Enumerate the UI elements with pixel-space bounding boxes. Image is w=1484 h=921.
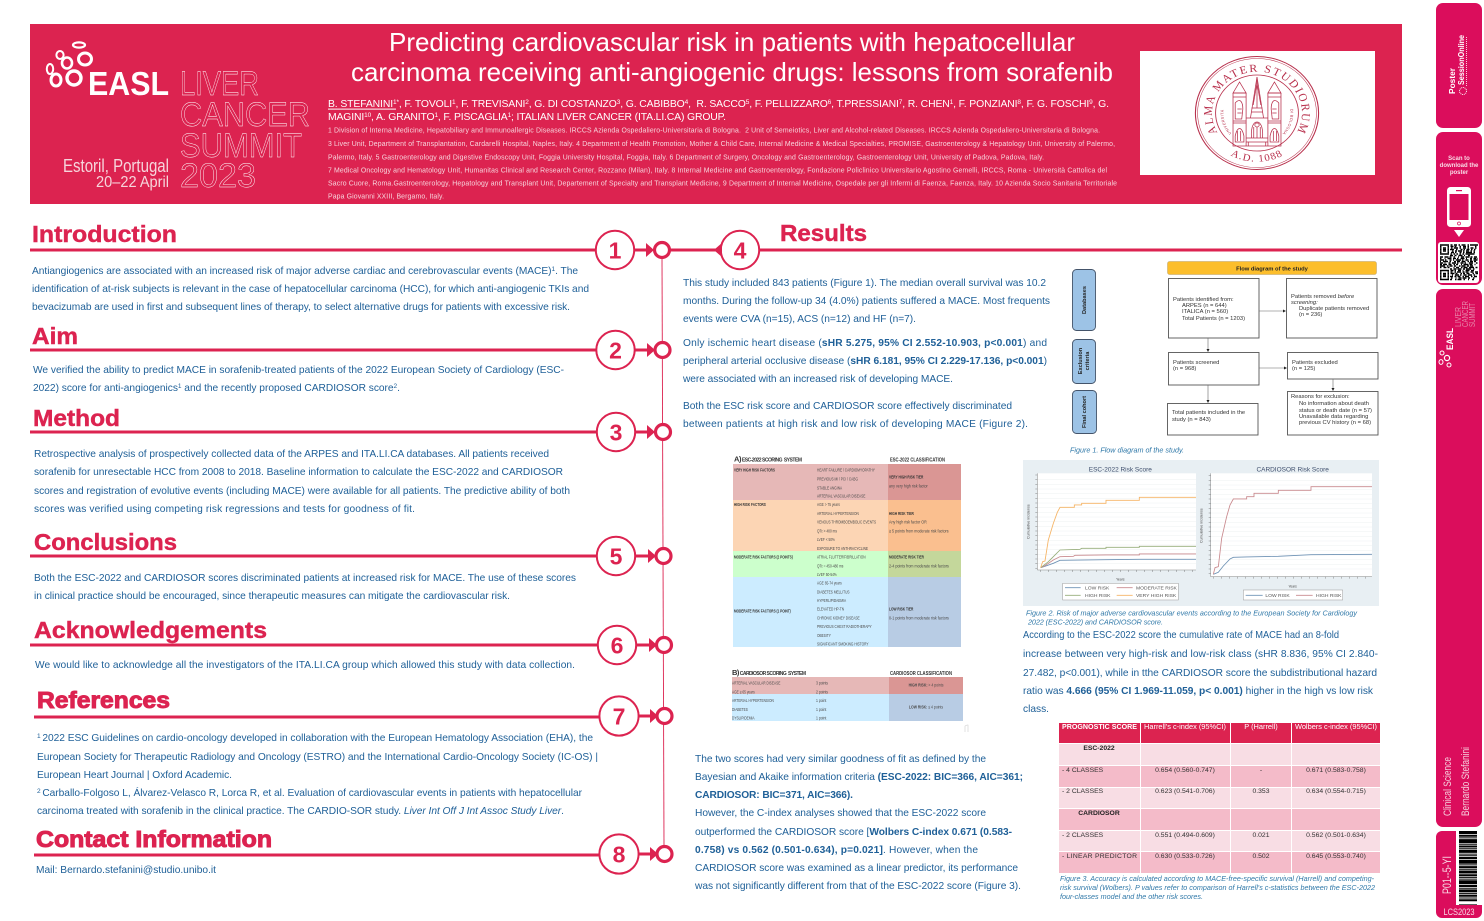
sidebar xyxy=(1436,3,1482,918)
flow header: Flow diagram of the study xyxy=(1236,266,1309,272)
table rows: - 2 CLASSES xyxy=(1062,832,1104,839)
table A: ESC-2022 scoring system: STABLE ANGINA xyxy=(817,485,842,491)
sidebar: poster session online logo xyxy=(1436,3,1482,128)
sidebar: poster session online logo: SessionOnline xyxy=(1457,35,1466,85)
table rows xyxy=(1059,744,1380,873)
authors xyxy=(328,99,1109,123)
heading: method: Method xyxy=(33,405,120,431)
results text upper: peripheral arterial occlusive disease (sHR 6.181, 95% CI 2.229-17.136, p<0.001) xyxy=(683,356,1047,367)
authors: 8 xyxy=(1017,99,1021,106)
results text lower: 0.758) vs 0.562 (0.501-0.634), p=0.021]. However, when the xyxy=(695,845,978,856)
sidebar: scan to download: poster xyxy=(1450,170,1469,176)
table A: ESC-2022 scoring system: AGE 65-74 years xyxy=(817,580,842,586)
introduction text: identification of at-risk subjects is relevant in the case of hepatocellular carcinoma (HCC), for which anti-angiogenic TKIs and xyxy=(32,284,589,295)
chart: ESC-2022 risk score: MODERATE RISK xyxy=(1136,585,1178,591)
University of Bologna seal xyxy=(1140,51,1375,175)
aim text: 2 xyxy=(394,383,398,390)
table rows: 0.671 (0.583-0.758) xyxy=(1306,767,1366,774)
affiliations: Papa Giovanni XXIII, Bergamo, Italy. xyxy=(328,194,444,200)
chart: CARDIOSOR risk score: HIGH RISK xyxy=(1316,593,1342,599)
results text right xyxy=(1023,630,1378,715)
table B: CARDIOSOR scoring system: ARTERIAL VASCULAR DISEASE xyxy=(732,680,781,686)
affiliations: 1 Division of Interna Medicine, Hepatobiliary and Immunoallergic Diseases. IRCCS Azienda Ospedaliero-Universitaria di Bologna. 2 Unit of Semeiotics, Liver and Alcohol-related Diseases. IRCCS Azienda Ospedaliero-Universitaria di Bologna. xyxy=(328,128,1100,134)
conclusions text xyxy=(34,573,576,602)
title xyxy=(351,27,1113,87)
results text lower: outperformed the CARDIOSOR score [Wolbers C-index 0.671 (0.583- xyxy=(695,827,1012,838)
authors: 9 xyxy=(1089,99,1093,106)
aim text: 1 xyxy=(178,383,182,390)
sidebar: scan to download xyxy=(1436,132,1482,285)
EASL Liver Cancer Summit logo: 2023 xyxy=(180,157,256,195)
aim text: and the recently proposed CARDIOSOR score xyxy=(181,383,394,394)
authors: 10 xyxy=(364,112,372,119)
table rows: ESC-2022 xyxy=(1083,745,1115,752)
table A: ESC-2022 scoring system: any very high risk factor xyxy=(889,483,928,489)
affiliations: 7 Medical Oncology and Hematology Unit, Humanitas Clinical and Research Center, Rozzano (Milan), Italy. 8 Internal Medicine and Gastroenterology, Fondazione Policlinico Universitario Agostino Gemelli, IRCCS, Roma - Università Cattolica del xyxy=(328,168,1107,174)
authors: , F. TREVISANI xyxy=(456,99,525,110)
table A: ESC-2022 scoring system: ESC-2022 CLASSIFICATION xyxy=(890,458,945,464)
method text: scores was verified using competing risk regressions and tests for goodness of fit. xyxy=(34,504,415,515)
node 1: 1 xyxy=(609,238,622,264)
node 7: 7 xyxy=(613,704,625,730)
table B: CARDIOSOR scoring system: LOW RISK: ≤ 4 points xyxy=(909,704,943,710)
conclusions text: Both the ESC-2022 and CARDIOSOR scores discriminated patients at increased risk for MACE. The use of these scores xyxy=(34,573,576,584)
stage labels: Exclusion xyxy=(1078,347,1084,374)
EASL Liver Cancer Summit logo: SUMMIT xyxy=(180,127,302,165)
authors: 3 xyxy=(617,99,621,106)
results text lower: CARDIOSOR score was examined as a linear predictor, its performance xyxy=(695,863,1018,874)
table A: ESC-2022 scoring system: VERY HIGH RISK FACTORS xyxy=(734,467,775,473)
table B: CARDIOSOR scoring system: 3 points xyxy=(816,680,828,686)
node 4 xyxy=(714,231,759,269)
figure 3 caption: Figure 3. Accuracy is calculated according to MACE-free-specific survival (Harrell) and competing- xyxy=(1060,874,1375,883)
aim text xyxy=(33,365,564,394)
flow text: screening: xyxy=(1291,300,1318,306)
authors: , F. G. FOSCHI xyxy=(1021,99,1089,110)
heading: contact information: Contact Information xyxy=(36,826,272,852)
chart: CARDIOSOR risk score: Years xyxy=(1288,584,1297,588)
University of Bologna seal: A.D. 1088 xyxy=(1230,150,1282,162)
stage labels xyxy=(1072,270,1096,434)
icon: phone xyxy=(1447,187,1471,227)
authors: 1 xyxy=(434,112,438,119)
timeline connector xyxy=(654,242,722,846)
authors: B. STEFANINI xyxy=(328,99,393,110)
table rows: 0.654 (0.560-0.747) xyxy=(1155,767,1215,774)
authors: 1 xyxy=(508,112,512,119)
authors: 2 xyxy=(525,99,529,106)
node 6 xyxy=(598,626,672,664)
figure 3 caption xyxy=(1060,874,1375,901)
sidebar: poster session online logo: Poster xyxy=(1447,67,1457,94)
flow text: Patients screened xyxy=(1173,360,1219,366)
contact text: Mail: Bernardo.stefanini@studio.unibo.it xyxy=(36,865,216,876)
table A: ESC-2022 scoring system: MODERATE RISK FACTORS (2 POINTS) xyxy=(734,554,793,560)
affiliations: 3 Liver Unit, Department of Transplantation, Cardarelli Hospital, Naples, Italy. 4 Department of Health Promotion, Mother & Child Care, Internal Medicine & Medical Specialties, PROMISE, Gastroenterology & Hepatology Unit, University of Palermo, xyxy=(328,141,1115,148)
authors: , G. xyxy=(1093,99,1109,110)
results text upper: events were CVA (n=15), ACS (n=12) and HF (n=7). xyxy=(683,314,916,325)
introduction text: 1 xyxy=(551,266,555,273)
table rows: 0.630 (0.533-0.726) xyxy=(1155,853,1215,860)
table A: ESC-2022 scoring system: PREVIOUS MI / PCI / CABG xyxy=(817,476,858,482)
table A: ESC-2022 scoring system: QTc > 480 ms xyxy=(817,528,837,534)
table B: CARDIOSOR scoring system: 1 point xyxy=(816,715,827,721)
flow text: Reasons for exclusion: xyxy=(1291,394,1350,400)
flow text: (n = 236) xyxy=(1299,312,1322,318)
method text: scores and registration of evolutive events (including MACE) were available for all patients. The predictive ability of both xyxy=(34,486,570,497)
authors: 1* xyxy=(393,99,399,106)
chart: ESC-2022 risk score xyxy=(1027,467,1196,600)
table A: ESC-2022 scoring system: LOW RISK TIER xyxy=(889,606,913,612)
results text right: According to the ESC-2022 score the cumulative rate of MACE had an 8-fold xyxy=(1023,630,1339,641)
table A: ESC-2022 scoring system: EXPOSURE TO ANTHRACYCLINE xyxy=(817,545,868,551)
table A: ESC-2022 scoring system: PREVIOUS CHEST RADIOTHERAPY xyxy=(817,623,872,629)
table rows: - 2 CLASSES xyxy=(1062,788,1104,795)
QR code xyxy=(1438,242,1479,283)
table A: ESC-2022 scoring system: DIABETES MELLITUS xyxy=(817,589,850,595)
heading: conclusions: Conclusions xyxy=(34,529,177,555)
table A: ESC-2022 scoring system: Any high risk factor OR xyxy=(889,519,927,525)
flow text: Unavailable data regarding xyxy=(1299,414,1368,420)
method text: sorafenib for unresectable HCC from 2008 to 2018. Baseline information to calculate the ESC-2022 and CARDIOSOR xyxy=(34,467,563,478)
EASL Liver Cancer Summit logo: EASL xyxy=(88,65,169,102)
table A: ESC-2022 scoring system: 2-4 points from moderate risk factors xyxy=(889,563,949,569)
results text upper: months. During the follow-up 34 (4.0%) patients suffered a MACE. Most frequents xyxy=(683,296,1050,307)
node 5 xyxy=(597,537,671,575)
results text right: increase between very high-risk and low-risk class (sHR 8.836, 95% CI 2.840- xyxy=(1023,649,1378,660)
chart: ESC-2022 risk score: ESC-2022 Risk Score xyxy=(1089,467,1152,474)
table B: CARDIOSOR scoring system: CARDIOSOR CLASSIFICATION xyxy=(890,671,952,677)
node 3: 3 xyxy=(610,420,622,446)
sidebar EASL logo: EASL xyxy=(1445,328,1456,350)
introduction text: Antiangiogenics are associated with an increased risk of major adverse cardiac and cerebrovascular events (MACE) xyxy=(32,266,552,277)
figure 2 caption xyxy=(1026,608,1357,626)
sidebar EASL logo xyxy=(1439,301,1477,367)
heading: results: Results xyxy=(780,220,867,246)
node 2 xyxy=(596,331,670,369)
table rows: CARDIOSOR xyxy=(1078,810,1120,817)
chart: CARDIOSOR risk score xyxy=(1200,467,1372,600)
table B: CARDIOSOR scoring system: B) CARDIOSOR SCORING SYSTEM xyxy=(732,668,806,677)
flow text: (n = 968) xyxy=(1173,366,1196,372)
table A: ESC-2022 scoring system: ARTERIAL VASCULAR DISEASE xyxy=(817,493,866,499)
flow text: study (n = 843) xyxy=(1172,417,1211,423)
table header xyxy=(1059,722,1380,743)
session text: Clinical Science xyxy=(1442,757,1454,816)
results text lower: The two scores had very similar goodness of fit as defined by the xyxy=(695,754,986,765)
table A: ESC-2022 scoring system: LVEF < 50% xyxy=(817,536,835,542)
table B: CARDIOSOR scoring system: DYSLIPIDEMIA xyxy=(732,715,755,721)
University of Bologna seal: DI BOLOGNA xyxy=(1282,109,1294,134)
references text: European Society for Therapeutic Radiology and Oncology (ESTRO) and the International Cardio-Oncology Society (IC-OS) | xyxy=(37,752,598,763)
node 8: 8 xyxy=(613,842,626,868)
sidebar: conference and session xyxy=(1436,289,1482,827)
heading: introduction: Introduction xyxy=(32,221,177,247)
table A: ESC-2022 scoring system: SIGNIFICANT SMOKING HISTORY xyxy=(817,641,869,647)
EASL Liver Cancer Summit logo xyxy=(47,42,310,195)
heading: aim: Aim xyxy=(32,323,78,349)
table rows: 0.634 (0.554-0.715) xyxy=(1306,788,1366,795)
chart: ESC-2022 risk score: Years xyxy=(1116,578,1125,582)
chart: ESC-2022 risk score: Cumulative incidence xyxy=(1027,504,1031,539)
node 1 xyxy=(596,231,654,269)
sidebar EASL logo: LIVER xyxy=(1453,307,1463,327)
flow text: Total Patients (n = 1203) xyxy=(1182,316,1245,322)
table: prognostic accuracy xyxy=(1059,722,1380,873)
section: introduction xyxy=(30,221,654,313)
method text xyxy=(34,449,570,515)
references text xyxy=(37,733,598,817)
table A: ESC-2022 scoring system: CHRONIC KIDNEY DISEASE xyxy=(817,615,860,621)
results text upper xyxy=(682,278,1050,430)
results text upper: between patients at high risk and low risk of developing MACE (Figure 2). xyxy=(683,419,1028,430)
aim text: We verified the ability to predict MACE in sorafenib-treated patients of the 2022 European Society of Cardiology (ESC- xyxy=(33,365,564,376)
section: method xyxy=(30,405,670,515)
table A: ESC-2022 scoring system: HIGH RISK TIER xyxy=(889,510,914,516)
flow text: Total patients included in the xyxy=(1172,410,1245,416)
aim text: 2022) score for anti-angiogenics xyxy=(33,383,178,394)
results text right: 27.482, p<0.001), while in tthe CARDIOSOR score the subdistributional hazard xyxy=(1023,668,1377,679)
table B: CARDIOSOR scoring system: HIGH RISK: > 4 points xyxy=(909,682,943,688)
flow text: No information about death xyxy=(1299,401,1369,407)
introduction text: bevacizumab are used in first and subsequent lines of therapy, to select alternative drugs for patients with excessive risk. xyxy=(32,302,570,313)
section: aim xyxy=(30,323,670,394)
conclusions text: in clinical practice should be encouraged, since therapeutic measures can mitigate the cardiovascular risk. xyxy=(34,591,510,602)
figure 2 panel xyxy=(1023,460,1379,606)
flow diagram xyxy=(1072,262,1378,435)
authors: , G. DI COSTANZO xyxy=(529,99,617,110)
node 4: 4 xyxy=(734,238,747,264)
results text right: class. xyxy=(1023,704,1049,715)
table rows: 0.551 (0.494-0.609) xyxy=(1155,832,1215,839)
sidebar: scan to download: Scan to xyxy=(1448,156,1470,162)
table rows: 0.021 xyxy=(1252,832,1270,839)
table rows: 0.623 (0.541-0.706) xyxy=(1155,788,1215,795)
stage labels: Final cohort xyxy=(1082,396,1088,428)
authors: 5 xyxy=(746,99,750,106)
figure 3 caption: four-classes model and the other risk scores. xyxy=(1060,892,1203,901)
node 3 xyxy=(597,413,670,451)
node 6: 6 xyxy=(611,632,623,658)
University of Bologna seal: ALMA MATER STUDIORUM xyxy=(1204,64,1310,134)
authors: , F. TOVOLI xyxy=(399,99,452,110)
section: acknowledgements xyxy=(30,617,672,671)
table rows: 0.502 xyxy=(1252,853,1270,860)
table A: ESC-2022 scoring system: OBESITY xyxy=(817,632,831,638)
table rows: - xyxy=(1260,767,1262,774)
flow text: (n = 125) xyxy=(1292,366,1315,372)
authors: 6 xyxy=(828,99,832,106)
results text lower xyxy=(694,754,1023,892)
references text: 2 xyxy=(37,788,42,795)
section: references xyxy=(34,687,672,817)
node 5: 5 xyxy=(610,544,623,570)
method text: Retrospective analysis of prospectively collected data of the ARPES and ITA.LI.CA databases. All patients received xyxy=(34,449,549,460)
sidebar EASL logo: CANCER xyxy=(1460,301,1470,327)
table A: ESC-2022 scoring system: ≥ 5 points from moderate risk factors xyxy=(889,528,949,534)
flow text: previous CV history (n = 68) xyxy=(1299,420,1371,426)
figure 2 caption: 2022 (ESC-2022) and CARDIOSOR score. xyxy=(1026,618,1163,626)
EASL Liver Cancer Summit logo: Estoril, Portugal xyxy=(63,156,169,176)
table rows: 0.562 (0.501-0.634) xyxy=(1306,832,1366,839)
table A: ESC-2022 scoring system: HYPERLIPIDAEMIA xyxy=(817,597,846,603)
flow text: Patients identified from: xyxy=(1173,297,1234,303)
table B: CARDIOSOR scoring system: AGE ≥ 65 years xyxy=(732,689,755,695)
table A: ESC-2022 scoring system: LVEF 50-54% xyxy=(817,571,837,577)
introduction text: . The xyxy=(555,266,578,277)
sidebar EASL logo: SUMMIT xyxy=(1467,303,1477,327)
table B: CARDIOSOR scoring system xyxy=(732,668,968,732)
node 8 xyxy=(599,834,672,874)
sidebar: poster code and barcode xyxy=(1436,831,1482,918)
table B: CARDIOSOR scoring system: 1 point xyxy=(816,697,827,703)
results text upper: This study included 843 patients (Figure 1). The median overall survival was 10.2 xyxy=(683,278,1046,289)
chart: ESC-2022 risk score: VERY HIGH RISK xyxy=(1136,593,1177,599)
figure 3 caption: risk survival (Wolbers). P values refer to comparison of Harrell's c-statistics between the ESC-2022 xyxy=(1060,883,1375,892)
flow text: ARPES (n = 644) xyxy=(1182,303,1227,309)
flow text: Patients excluded xyxy=(1292,360,1338,366)
section: conclusions xyxy=(30,529,671,602)
EASL Liver Cancer Summit logo: CANCER xyxy=(180,96,310,134)
EASL Liver Cancer Summit logo: 20–22 April xyxy=(96,174,169,191)
table header: Wolbers c-index (95%CI) xyxy=(1295,722,1377,731)
flow header xyxy=(1168,262,1376,274)
table A: ESC-2022 scoring system xyxy=(733,454,961,647)
table header: P (Harrell) xyxy=(1244,722,1278,731)
flow boxes xyxy=(1168,278,1378,435)
authors: , G. CABIBBO xyxy=(620,99,685,110)
session text: Bernardo Stefanini xyxy=(1460,747,1472,816)
chart: CARDIOSOR risk score: CARDIOSOR Risk Score xyxy=(1256,467,1329,474)
flow text: ITALICA (n = 560) xyxy=(1182,309,1228,315)
authors: , R. CHEN xyxy=(902,99,950,110)
flow text: Patients removed before xyxy=(1291,294,1355,300)
table B: CARDIOSOR scoring system: 2 points xyxy=(816,689,828,695)
table rows: - 4 CLASSES xyxy=(1062,767,1104,774)
authors: 4 xyxy=(685,99,689,106)
table A: ESC-2022 scoring system: HEART FAILURE / CARDIOMYOPATHY xyxy=(817,467,875,473)
affiliations: Palermo, Italy. 5 Gastroenterology and Digestive Endoscopy Unit, Foggia University Hospital, Foggia, Italy. 6 Department of Surgery, Oncology and Gastroenterology, Gastroenterology Unit, University of Padova, Padova, Italy. xyxy=(328,154,1044,162)
table A: ESC-2022 scoring system: AGE > 75 years xyxy=(817,501,840,507)
authors: , R. SACCO xyxy=(688,99,746,110)
figure 1 caption: Figure 1. Flow diagram of the study. xyxy=(1070,446,1184,454)
stage labels: Databases xyxy=(1082,286,1088,314)
sidebar: poster code and barcode: P01--5-YI xyxy=(1440,856,1454,894)
table A: ESC-2022 scoring system: ATRIAL FLUTTER/FIBRILLATION xyxy=(817,554,866,560)
references text: Carballo-Folgoso L, Álvarez-Velasco R, Lorca R, et al. Evaluation of cardiovascular events in patients with hepatocellular xyxy=(42,786,583,799)
header banner xyxy=(30,24,1402,204)
stage labels: criteria xyxy=(1085,351,1091,370)
flow text: status or death date (n = 57) xyxy=(1299,408,1372,414)
table A: ESC-2022 scoring system: A) ESC-2022 SCORING SYSTEM xyxy=(734,454,802,464)
table A: ESC-2022 scoring system: VENOUS THROMBOEMBOLIC EVENTS xyxy=(817,519,876,525)
table B: CARDIOSOR scoring system: ARTERIAL HYPERTENSION xyxy=(732,697,774,703)
references text: 2022 ESC Guidelines on cardio-oncology developed in collaboration with the European Hematology Association (EHA), the xyxy=(42,733,593,744)
table A: ESC-2022 scoring system: 0-1 points from moderate risk factors xyxy=(889,615,949,621)
flow arrows xyxy=(1206,310,1334,403)
table header: PROGNOSTIC SCORE xyxy=(1062,723,1137,731)
table A: ESC-2022 scoring system: ELEVATED HP-TN xyxy=(817,606,844,612)
results text lower: CARDIOSOR: BIC=371, AIC=366). xyxy=(695,790,853,801)
figure 2 caption: Figure 2. Risk of major adverse cardiovascular events according to the European Society for Cardiology xyxy=(1026,608,1357,618)
title: carcinoma receiving anti-angiogenic drugs: lessons from sorafenib xyxy=(351,57,1113,87)
flow text xyxy=(1172,294,1372,426)
heading: acknowledgements: Acknowledgements xyxy=(34,617,267,643)
results text upper: were associated with an increased risk of developing MACE. xyxy=(682,374,953,385)
node 7 xyxy=(599,696,672,736)
node 2: 2 xyxy=(609,338,622,364)
chart: ESC-2022 risk score: HIGH RISK xyxy=(1085,593,1111,599)
session text xyxy=(1442,747,1472,816)
chart: ESC-2022 risk score: LOW RISK xyxy=(1085,585,1110,591)
authors: , F. PISCAGLIA xyxy=(438,112,508,123)
aim text: . xyxy=(397,383,400,394)
authors: ; ITALIAN LIVER CANCER (ITA.LI.CA) GROUP. xyxy=(511,112,726,123)
chart: CARDIOSOR risk score: LOW RISK xyxy=(1265,593,1290,599)
section: results xyxy=(682,220,1402,430)
sidebar: poster code and barcode: LCS2023 xyxy=(1444,907,1474,917)
table A: ESC-2022 scoring system: MODERATE RISK FACTORS (1 POINT) xyxy=(734,608,791,614)
section: contact information xyxy=(34,826,672,876)
authors: , A. GRANITO xyxy=(371,112,435,123)
results text upper: Only ischemic heart disease (sHR 5.275, 95% CI 2.552-10.903, p<0.001) and xyxy=(683,338,1047,349)
authors: , F. PELLIZZARO xyxy=(749,99,828,110)
authors: MAGINI xyxy=(328,112,364,123)
affiliations xyxy=(328,128,1117,200)
references text: European Heart Journal | Oxford Academic. xyxy=(37,770,232,781)
authors: 1 xyxy=(950,99,954,106)
table A: ESC-2022 scoring system: HIGH RISK FACTORS xyxy=(734,501,766,507)
authors: , T.PRESSIANI xyxy=(831,99,899,110)
heading: references: References xyxy=(37,687,170,713)
results text lower: Bayesian and Akaike information criteria (ESC-2022: BIC=366, AIC=361; xyxy=(695,772,1023,783)
EASL Liver Cancer Summit logo: LIVER xyxy=(180,65,259,103)
references text: carcinoma treated with sorafenib in the clinical practice. The CARDIO-SOR study. Liver Int Off J Int Assoc Study Liver. xyxy=(37,806,564,817)
results text upper: Both the ESC risk score and CARDIOSOR score effectively discriminated xyxy=(683,401,1012,412)
results text lower: was not significantly different from that of the ESC-2022 score (Figure 3). xyxy=(694,881,1021,892)
sidebar: scan to download: download the xyxy=(1440,163,1479,169)
authors: 7 xyxy=(899,99,903,106)
results text right: ratio was 4.666 (95% CI 1.969-11.059, p< 0.001) higher in the high vs low risk xyxy=(1023,686,1374,697)
affiliations: Sacro Cuore, Roma.Gastroenterology, Hepatology and Transplant Unit, Departement of Specialty and Transplant Medicine, 9 Department of Internal Medicine, Ospedale per gli Infermi di Faenza, Faenza, Italy. 10 Azienda Socio Sanitaria Territoriale xyxy=(328,180,1117,188)
University of Bologna seal: UNIVERSITÀ xyxy=(1220,110,1231,135)
title: Predicting cardiovascular risk in patients with hepatocellular xyxy=(389,27,1075,57)
flow text: Duplicate patients removed xyxy=(1299,306,1369,312)
table B: CARDIOSOR scoring system: DIABETES xyxy=(732,706,748,712)
table A: ESC-2022 scoring system: MODERATE RISK TIER xyxy=(889,554,924,560)
authors: , F. PONZIANI xyxy=(953,99,1018,110)
table rows: 0.645 (0.553-0.740) xyxy=(1306,853,1366,860)
icon: down triangle xyxy=(1454,230,1464,237)
introduction text xyxy=(32,266,589,313)
table B: CARDIOSOR scoring system: 1 point xyxy=(816,706,827,712)
table A: ESC-2022 scoring system: QTc = 450-480 ms xyxy=(817,563,843,569)
references text: 1 xyxy=(37,733,42,740)
table rows: 0.353 xyxy=(1252,788,1270,795)
acknowledgements text: We would like to acknowledge all the investigators of the ITA.LI.CA group which allowed this study with data collection. xyxy=(35,660,575,671)
table rows: - LINEAR PREDICTOR xyxy=(1062,853,1137,860)
table A: ESC-2022 scoring system: VERY HIGH RISK TIER xyxy=(889,474,923,480)
chart: CARDIOSOR risk score: Cumulative incidence xyxy=(1200,508,1204,543)
table header: Harrell's c-index (95%CI) xyxy=(1144,722,1226,731)
table A: ESC-2022 scoring system: ARTERIAL HYPERTENSION xyxy=(817,510,859,516)
authors: 1 xyxy=(452,99,456,106)
results text lower: However, the C-index analyses showed that the ESC-2022 score xyxy=(695,808,986,819)
